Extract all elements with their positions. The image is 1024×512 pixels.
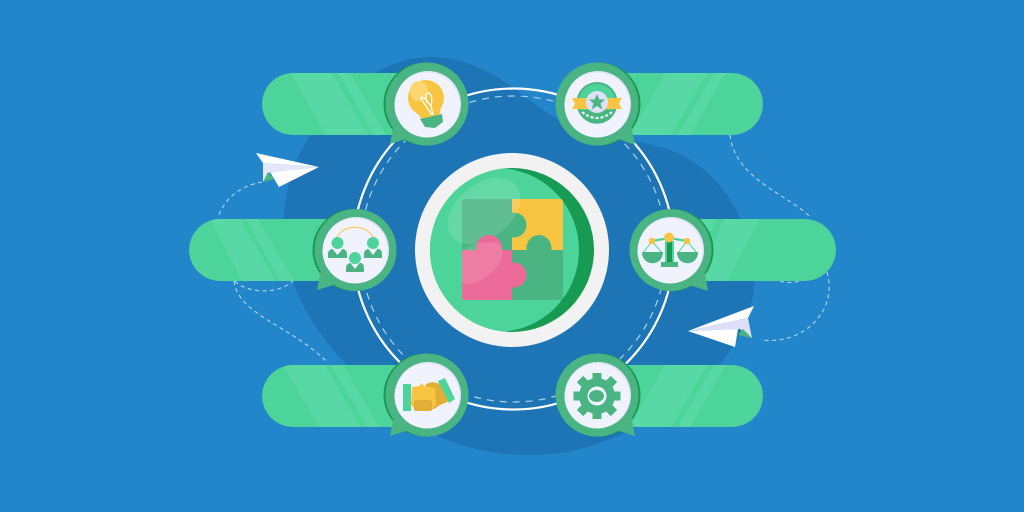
puzzle highlight: lower (462, 242, 503, 284)
badge: gear (556, 354, 640, 436)
center medallion (415, 153, 609, 347)
pill: middle left (189, 219, 326, 281)
medallion outer ring (415, 153, 609, 347)
icon: three people (328, 227, 382, 272)
medallion green disc (415, 168, 579, 332)
pill: top left (262, 73, 398, 135)
medallion dark crescent (430, 168, 594, 332)
puzzle piece: yellow top right (512, 199, 563, 250)
paper plane: right (688, 306, 754, 347)
icon: gear (574, 373, 620, 419)
pill: bottom right (628, 365, 763, 427)
badge: team (312, 209, 396, 291)
badge: idea (384, 62, 468, 146)
badge: handshake (384, 354, 468, 436)
infographic illustration: teamwork puzzle hub (189, 57, 836, 455)
dashed flight paths (218, 135, 829, 362)
paper plane: left (256, 153, 319, 187)
person left (328, 237, 347, 258)
puzzle piece: pink bottom left (462, 235, 526, 300)
pill: top right (626, 73, 763, 135)
badge: balance scale (630, 209, 714, 291)
puzzle (435, 164, 563, 300)
badge: award (556, 62, 640, 146)
icon: light bulb (408, 80, 444, 128)
outer white ring (353, 88, 674, 410)
background blob (284, 57, 755, 455)
puzzle piece: green bottom right (512, 235, 563, 300)
icon: handshake (403, 378, 455, 411)
icon: scales (642, 232, 698, 267)
puzzle piece: green top left (462, 199, 526, 250)
person bottom (346, 252, 364, 272)
inner dashed ring (360, 96, 666, 402)
pill: bottom left (262, 365, 396, 427)
person right (364, 237, 382, 258)
pill: middle right (700, 219, 836, 281)
puzzle highlight: upper (435, 164, 533, 258)
icon: award ribbon (572, 82, 622, 124)
